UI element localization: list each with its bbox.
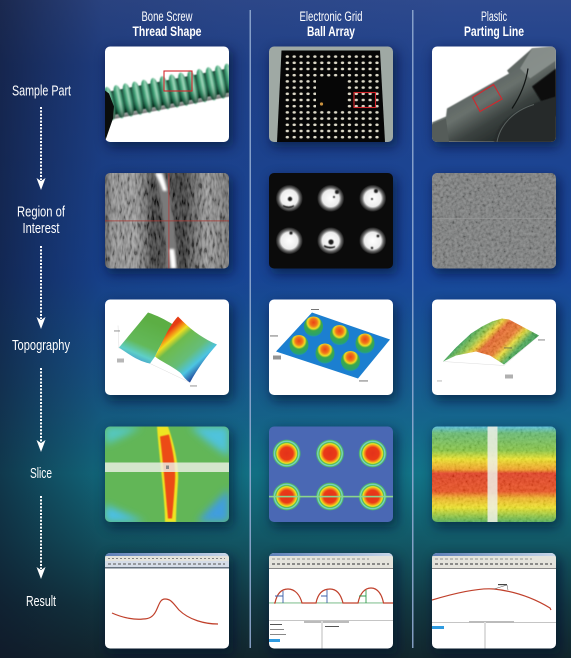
label: Sample Part: Sample Part	[12, 84, 71, 100]
panel shadows	[107, 50, 560, 654]
heading: Electronic Grid Ball Array	[300, 9, 362, 39]
heading: Bone Screw Thread Shape: Thread Shape	[132, 23, 202, 39]
panel: bone screw sample part	[105, 46, 229, 142]
arrow: sample part to region of interest	[36, 107, 46, 190]
label: Slice: Slice	[30, 466, 52, 482]
panel: parting line region of interest	[432, 173, 556, 268]
heading: Bone Screw Thread Shape	[132, 9, 202, 39]
arrow: region of interest to topography	[36, 246, 46, 329]
label: Region of Interest	[17, 204, 66, 237]
label: Region of Interest: Region of	[17, 204, 66, 220]
panel: bone screw topography	[105, 300, 229, 395]
heading: Electronic Grid Ball Array: Electronic Grid	[300, 9, 362, 24]
panel: ball array result	[269, 553, 393, 649]
heading: Bone Screw Thread Shape: Bone Screw	[142, 9, 193, 24]
arrow: slice to result	[36, 496, 46, 579]
column dividers	[250, 10, 414, 648]
panel: parting line slice	[432, 426, 556, 522]
heading: Plastic Parting Line: Plastic	[481, 9, 507, 24]
panel: parting line sample part	[432, 46, 556, 142]
heading: Plastic Parting Line	[464, 9, 524, 39]
panel: ball array slice	[269, 426, 393, 522]
panel: bone screw result	[105, 553, 229, 648]
heading: Plastic Parting Line: Parting Line	[464, 23, 524, 39]
label: Result: Result	[26, 594, 56, 610]
label: Region of Interest: Interest	[22, 221, 60, 237]
panel: parting line result	[432, 553, 556, 649]
panel: ball array region of interest	[269, 173, 393, 268]
panel: ball array sample part	[269, 46, 393, 142]
label: Topography: Topography	[12, 338, 71, 354]
panel: ball array topography	[269, 300, 393, 395]
arrow: topography to slice	[36, 368, 46, 452]
panel: bone screw region of interest	[105, 173, 229, 268]
panel: parting line topography	[432, 300, 556, 395]
panel: bone screw slice	[105, 426, 229, 522]
heading: Electronic Grid Ball Array: Ball Array	[307, 23, 355, 39]
